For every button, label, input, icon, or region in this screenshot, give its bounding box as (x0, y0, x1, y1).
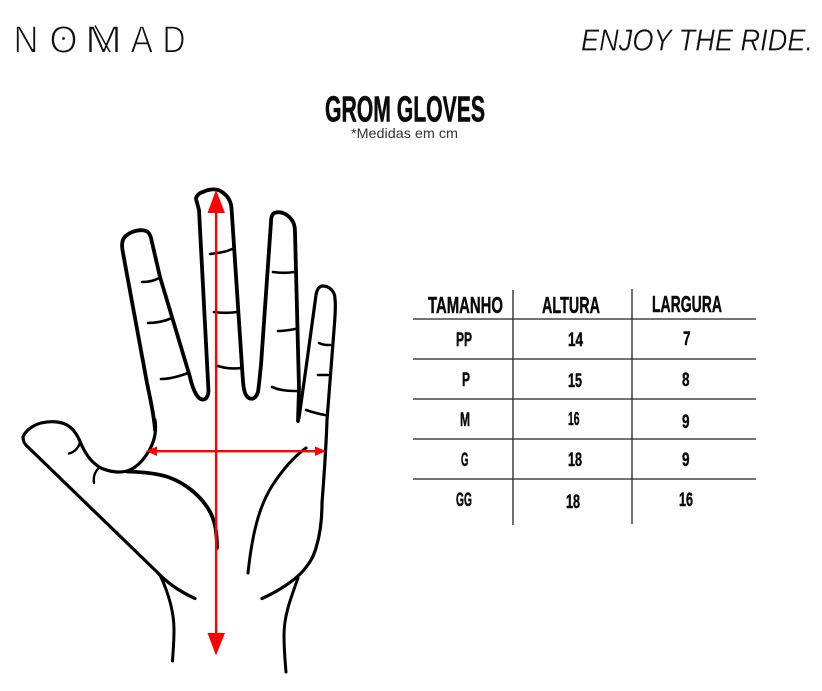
row G (461, 450, 690, 471)
row GG: 16 (679, 490, 693, 511)
width arrow (146, 446, 326, 456)
row M: 9 (682, 412, 690, 433)
row P (462, 370, 690, 392)
title: GROM GLOVES (325, 88, 485, 130)
logo: NOMAD: D (162, 20, 186, 62)
row GG (456, 490, 693, 513)
row GG: 18 (566, 492, 580, 513)
column headers: ALTURA (542, 292, 600, 318)
logo: NOMAD: M (85, 20, 122, 62)
row PP (456, 329, 690, 351)
row GG: GG (456, 490, 472, 511)
row P: 8 (682, 370, 690, 391)
subtitle: measurement note: *Medidas em cm (351, 125, 458, 141)
row P: 15 (568, 371, 582, 392)
row G: 18 (568, 450, 582, 471)
row PP: 14 (568, 330, 583, 351)
row PP: 7 (683, 329, 690, 350)
row M: 16 (568, 409, 580, 429)
wrist and palm creases (69, 442, 306, 672)
size table (413, 289, 756, 525)
row PP: PP (456, 330, 472, 351)
hand diagram (23, 189, 335, 672)
row G: 9 (682, 450, 690, 471)
finger knuckle lines (142, 249, 330, 415)
hand outline (23, 189, 335, 598)
table grid (413, 289, 756, 525)
logo: NOMAD: O (50, 20, 78, 62)
column headers: LARGURA (652, 291, 722, 317)
row M: M (460, 410, 470, 431)
row P: P (462, 370, 470, 391)
logo: NOMAD: N (14, 20, 38, 62)
column headers: TAMANHO (428, 292, 503, 318)
column headers (428, 291, 722, 318)
logo: NOMAD: A (130, 20, 154, 62)
height arrow (208, 190, 225, 656)
logo: NOMAD (14, 20, 186, 62)
row G: G (461, 450, 468, 471)
row M (460, 409, 690, 433)
